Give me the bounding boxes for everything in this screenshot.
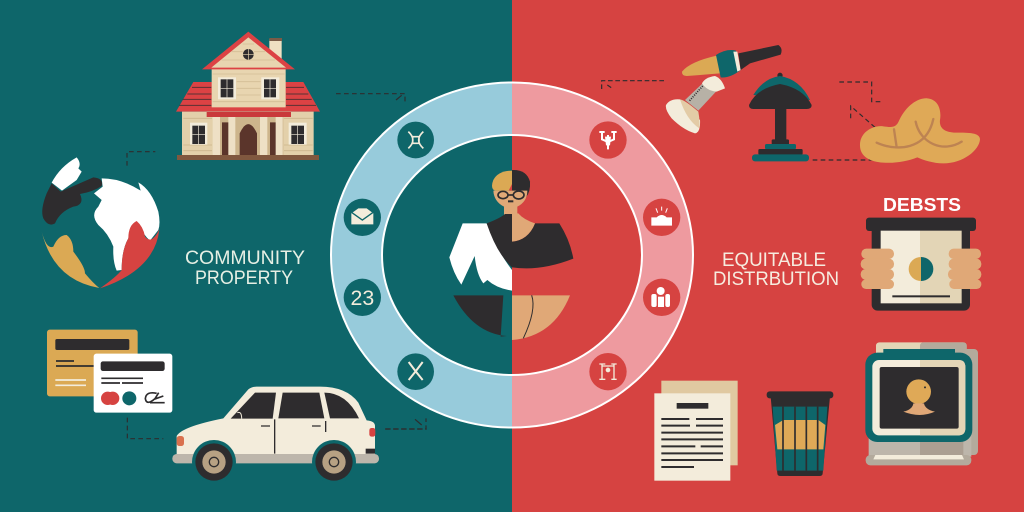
globe: top white landmass [52, 157, 82, 191]
connector: cards to car [127, 418, 163, 439]
house: porch roof [207, 112, 291, 117]
icon: crossed lines [397, 353, 434, 390]
house: ground floor [182, 112, 314, 156]
computer monitor [865, 342, 978, 465]
inner disc: left half [382, 135, 512, 375]
figure: black top [487, 214, 573, 268]
house: columns [213, 117, 283, 155]
megaphone [666, 76, 725, 133]
connector: left [602, 81, 664, 90]
trash bin [767, 391, 833, 476]
car: wheels [192, 440, 356, 484]
house: siding lines [183, 44, 313, 151]
house: gable window [243, 49, 254, 60]
heading: community property: COMMUNITY [185, 247, 305, 269]
credit cards [47, 330, 172, 439]
globe: red landmass [100, 221, 159, 288]
figure: tan skirt [512, 295, 570, 340]
heading: debts: DEBSTS [883, 194, 961, 215]
ring: right half [512, 83, 693, 427]
central split figure [449, 170, 573, 340]
connector: lamp to leaf [813, 158, 877, 162]
heading: equitable distribution: DISTRBUTION [713, 268, 839, 290]
house: ground floor siding [183, 118, 313, 151]
icon: number 23: 23 [350, 286, 374, 310]
figure: face and neck [493, 191, 527, 215]
house: upper walls [212, 68, 286, 107]
house: lower roof [176, 82, 320, 112]
card: gold [47, 330, 138, 396]
paint brush [682, 45, 782, 77]
central ring diagram [331, 82, 693, 428]
icon: open box [643, 199, 680, 236]
house: gable [202, 32, 295, 69]
house: door panels [222, 122, 276, 155]
globe: white landmass [94, 178, 159, 271]
car: mirror [237, 412, 242, 419]
icon: number 23 [344, 279, 381, 316]
heading: equitable distribution [713, 249, 839, 290]
icon: linked arrows [589, 353, 627, 390]
figure: white garment [449, 223, 512, 291]
connector: globe to house [127, 152, 155, 166]
connector: leaf arrows [839, 82, 881, 127]
house: chimney [269, 38, 282, 59]
icon: envelope tray [344, 199, 381, 236]
house: lower windows [190, 123, 307, 145]
figure: leg line [523, 295, 533, 338]
icon: group of people [643, 279, 680, 316]
panel: community property background [0, 0, 512, 512]
figure: black skirt [453, 295, 507, 337]
house: base [177, 155, 319, 160]
bottom right objects [654, 218, 981, 481]
car illustration [172, 387, 427, 484]
house: roof shingle lines [179, 87, 316, 105]
figure: glasses [498, 191, 524, 199]
connector: house to ring [336, 94, 405, 102]
car: lights [177, 428, 375, 454]
panel: equitable distribution background [512, 0, 1024, 512]
car: windows [231, 393, 359, 419]
car: door details [261, 419, 326, 454]
icon: branching arrows [589, 121, 627, 159]
house illustration [176, 32, 320, 160]
car: bumper [172, 454, 379, 463]
connector: car to ring [386, 427, 427, 431]
tablet held in hands [861, 218, 981, 311]
lamp [749, 73, 812, 161]
ring: left half [331, 83, 512, 427]
figure: skin chest [512, 213, 535, 242]
heading: community property: PROPERTY [195, 267, 293, 289]
globe: gold landmass [42, 232, 99, 288]
figure: hair right [512, 170, 530, 197]
document stack [654, 381, 738, 481]
house: upper windows [218, 77, 279, 99]
top right objects [602, 45, 980, 163]
inner disc: right half [512, 135, 642, 375]
ring outlines [331, 82, 693, 428]
card: white [94, 354, 172, 413]
house: porch [213, 117, 283, 155]
connector: ring to car arrow [385, 418, 426, 429]
heading: equitable distribution: EQUITABLE [722, 249, 826, 271]
figure: hair left [492, 171, 512, 191]
ring icons [344, 121, 680, 390]
leaf shape [860, 98, 980, 163]
globe: black landmass [42, 177, 102, 225]
car: body [177, 387, 375, 456]
house: gable front [211, 37, 286, 68]
figure: mouth [508, 198, 513, 204]
heading: community property [185, 247, 305, 289]
globe illustration [42, 152, 159, 288]
figure: forehead mark [509, 184, 512, 191]
icon: tied cross [397, 122, 434, 158]
